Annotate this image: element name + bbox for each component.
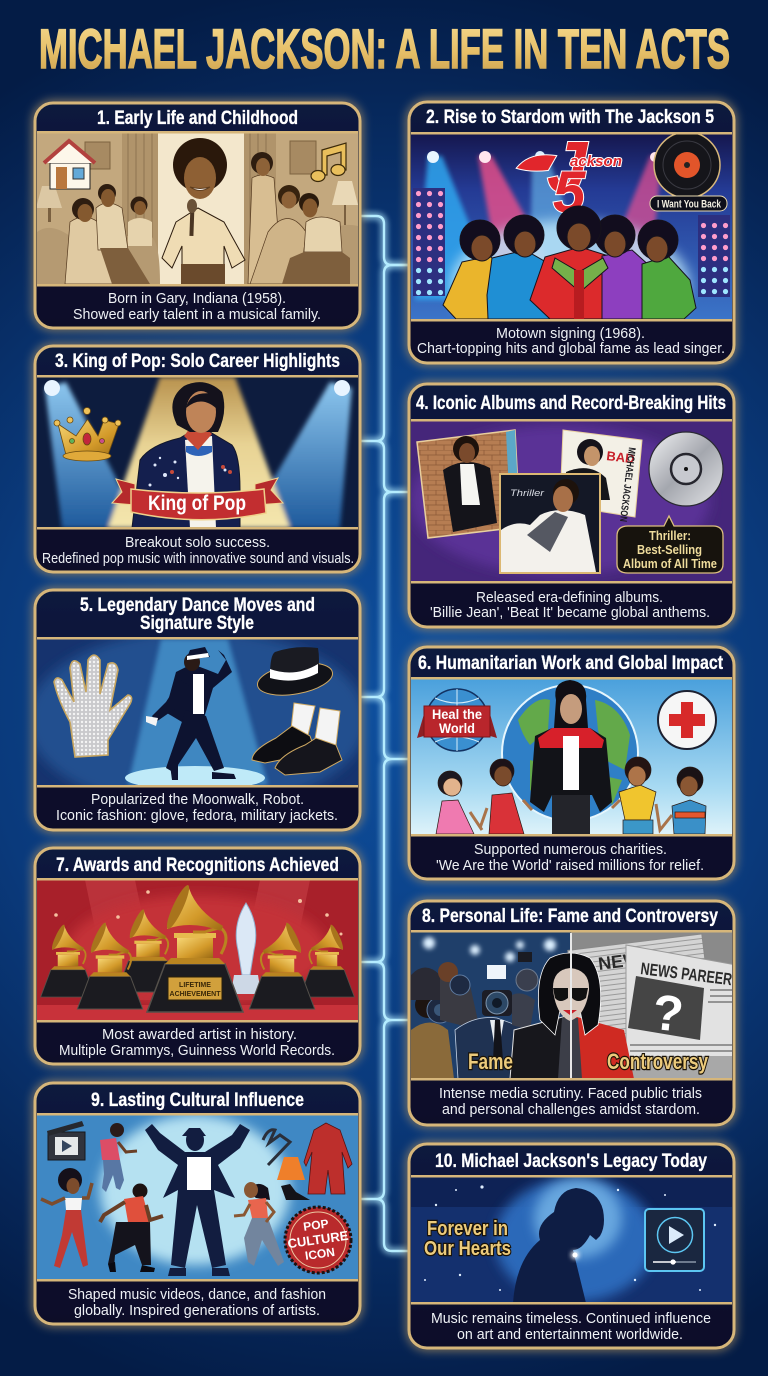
- caption: card 1: Showed early talent in a musical family.: [73, 306, 321, 323]
- caption: card 1: [73, 290, 321, 323]
- caption: card 8: Intense media scrutiny. Faced public trials: [439, 1085, 702, 1102]
- badge: pop culture icon: CULTURE: [287, 1228, 350, 1251]
- icon: red cross: [658, 691, 716, 749]
- heading: card 9: 9. Lasting Cultural Influence: [91, 1090, 304, 1111]
- heading: card 5: 5. Legendary Dance Moves and: [80, 595, 315, 616]
- panel: 5 dance moves: [27, 590, 367, 830]
- heading: card 3: 3. King of Pop: Solo Career Highlights: [55, 351, 340, 372]
- illustration: dancers and pop culture icons: [37, 1115, 358, 1280]
- icon: music player: [645, 1209, 704, 1271]
- icon: vinyl record: [650, 132, 727, 211]
- dancer: jumping woman: [100, 1123, 137, 1192]
- illustration: album covers and platinum disc: [410, 421, 732, 582]
- badge: Heal the World: Heal the: [432, 706, 482, 722]
- caption: card 8: [439, 1085, 702, 1118]
- badge: pop culture icon: ICON: [304, 1245, 336, 1263]
- main silhouette: [145, 1124, 250, 1276]
- caption: card 3: [42, 534, 354, 567]
- icon: platinum disc: [649, 432, 723, 506]
- heading: card 2: 2. Rise to Stardom with The Jackson 5: [426, 107, 714, 128]
- album: Thriller: Thriller: [510, 488, 545, 498]
- newspapers: NEWS PAREER: [640, 959, 733, 989]
- badge: Heal the World: [417, 689, 497, 751]
- caption: card 6: [436, 841, 704, 874]
- ribbon: King of Pop: King of Pop: [148, 492, 246, 515]
- figure: dancer on toes: [146, 647, 236, 780]
- globe: [502, 685, 638, 821]
- icon: sequin glove: [54, 655, 132, 757]
- heading: card 10: 10. Michael Jackson's Legacy Today: [435, 1151, 707, 1172]
- illustration: stage with five performers: [411, 134, 732, 319]
- callout: best selling album: Album of All Time: [623, 556, 717, 571]
- caption: card 10: on art and entertainment worldwide.: [457, 1326, 683, 1343]
- panel: 9 cultural influence: [35, 1083, 360, 1324]
- icon: loafers and socks: [252, 703, 342, 775]
- panel: 4 iconic albums: [409, 384, 734, 627]
- icon: music note: [311, 143, 346, 182]
- caption: card 10: Music remains timeless. Continued influence: [431, 1310, 711, 1327]
- album: Thriller: [500, 474, 600, 573]
- boy singing: [162, 138, 245, 284]
- heading: card 5: Signature Style: [140, 613, 254, 634]
- caption: card 9: globally. Inspired generations of artists.: [74, 1302, 320, 1319]
- illustration: family in sepia living room: [36, 133, 358, 284]
- panel: 1 early life: [35, 103, 360, 328]
- panel: 8 personal life: [409, 901, 736, 1125]
- label: Forever in Our Hearts: [424, 1218, 511, 1260]
- illustration: moonwalk and accessories: [37, 640, 358, 785]
- newspapers: [568, 934, 736, 1080]
- album: Bad: MICHAEL JACKSON: [617, 447, 637, 522]
- caption: card 3: Redefined pop music with innovative sound and visuals.: [42, 550, 354, 567]
- dancer: man in red shirt: [100, 1184, 163, 1272]
- caption: card 6: Supported numerous charities.: [474, 841, 667, 858]
- caption: card 1: Born in Gary, Indiana (1958).: [108, 290, 286, 307]
- callout: best selling album: [617, 516, 723, 573]
- badge: Heal the World: World: [439, 720, 475, 736]
- caption: card 5: [56, 791, 338, 824]
- logo: Jackson 5: [515, 141, 622, 213]
- label: Fame: Fame: [468, 1049, 513, 1074]
- dancer: woman in red: [41, 1168, 92, 1268]
- trophies: [41, 883, 354, 1012]
- icon: fedora: [257, 647, 333, 696]
- caption: card 4: 'Billie Jean', 'Beat It' became global anthems.: [430, 604, 710, 621]
- illustration: spotlight portrait: [37, 377, 358, 528]
- caption: card 8: and personal challenges amidst stardom.: [442, 1101, 700, 1118]
- caption: card 4: [430, 589, 710, 621]
- dancer: woman in jeans: [234, 1182, 284, 1266]
- heading: card 1: 1. Early Life and Childhood: [97, 108, 298, 129]
- caption: card 2: [417, 325, 725, 357]
- badge: pop culture icon: [285, 1207, 352, 1273]
- badge: pop culture icon: POP: [302, 1216, 329, 1234]
- icon: house: [44, 141, 95, 189]
- caption: card 4: Released era-defining albums.: [476, 589, 663, 606]
- album: Bad: [560, 430, 642, 522]
- icon: clapperboard: [47, 1121, 85, 1160]
- caption: card 3: Breakout solo success.: [125, 534, 270, 551]
- illustration: globe with children: [411, 679, 732, 835]
- caption: card 2: Chart-topping hits and global fame as lead singer.: [417, 340, 725, 357]
- newspapers: ?: [650, 984, 686, 1043]
- caption: card 7: Most awarded artist in history.: [102, 1026, 297, 1043]
- connector timeline: [361, 216, 408, 1251]
- caption: card 6: 'We Are the World' raised millions for relief.: [436, 857, 704, 874]
- illustration: paparazzi versus newspapers: [411, 932, 736, 1080]
- icon: red coat: [304, 1123, 352, 1194]
- caption: card 5: Iconic fashion: glove, fedora, military jackets.: [56, 807, 338, 824]
- caption: card 7: Multiple Grammys, Guinness World Records.: [59, 1042, 335, 1059]
- callout: best selling album: Best-Selling: [637, 542, 702, 557]
- label: Forever in Our Hearts: Forever in: [427, 1218, 508, 1240]
- trophies: LIFETIME: [179, 982, 211, 989]
- figure: Michael Jackson with children: [530, 680, 612, 834]
- ribbon: King of Pop: [112, 478, 283, 520]
- icon: vinyl record: I Want You Back: [657, 198, 722, 210]
- caption: card 5: Popularized the Moonwalk, Robot.: [91, 791, 304, 808]
- logo: Jackson 5: 5: [553, 160, 586, 225]
- photographers: [411, 952, 538, 1079]
- panel: 6 humanitarian: [409, 647, 734, 879]
- illustration: starry silhouette: [411, 1177, 732, 1303]
- logo: Jackson 5: ackson: [570, 153, 622, 170]
- newspapers: NEW: [597, 949, 641, 974]
- trophies: ACHIEVEMENT: [170, 991, 221, 998]
- figure: Michael Jackson in sequin jacket: [132, 382, 240, 528]
- label: Forever in Our Hearts: Our Hearts: [424, 1238, 511, 1260]
- panel: 10 legacy: [409, 1144, 734, 1348]
- caption: card 2: Motown signing (1968).: [496, 325, 645, 342]
- label: Controversy: Controversy: [607, 1049, 709, 1074]
- figure: half-and-half portrait: [510, 933, 634, 1079]
- logo: Jackson 5: J: [547, 128, 589, 208]
- children holding hands: [436, 757, 706, 834]
- performers: [443, 206, 696, 319]
- callout: best selling album: Thriller:: [649, 528, 691, 543]
- panel: 7 awards: [35, 848, 360, 1064]
- figure: silhouette: [513, 1188, 604, 1303]
- seated family: [65, 152, 350, 284]
- heading: card 5: [80, 595, 315, 634]
- caption: card 9: Shaped music videos, dance, and fashion: [68, 1286, 326, 1303]
- caption: card 10: [431, 1310, 711, 1343]
- album: Bad: BAD: [606, 448, 635, 466]
- icon: crown: [54, 408, 121, 461]
- heading: card 7: 7. Awards and Recognitions Achieved: [56, 855, 339, 876]
- icon: fashion items: [263, 1130, 310, 1200]
- panel: 2 jackson 5: [409, 102, 734, 363]
- album: Off the Wall: [417, 430, 520, 538]
- caption: card 7: [59, 1026, 335, 1059]
- caption: card 9: [68, 1286, 326, 1319]
- illustration: Grammy trophies: [37, 880, 358, 1021]
- panel: 3 king of pop: [35, 346, 360, 572]
